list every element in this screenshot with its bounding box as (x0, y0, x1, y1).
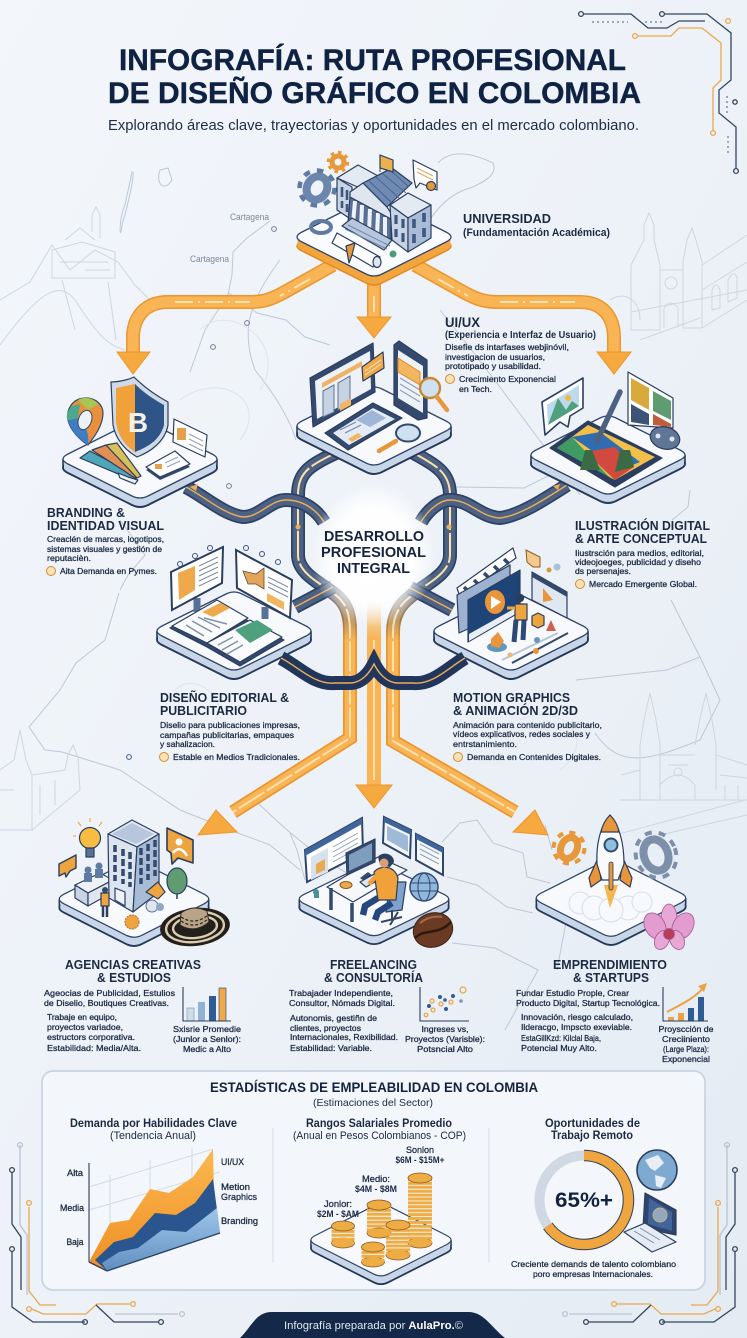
chart: mini scatter (420, 987, 469, 1021)
label: editorial: y sahalizacion. (160, 739, 215, 749)
icon: coffee bean (408, 907, 458, 953)
text: remote note: poro empresas Internacionales. (533, 1269, 653, 1279)
icon: timeline and shapes (487, 613, 568, 663)
panel: ui/ux (297, 341, 451, 474)
landmark: cathedral right (610, 213, 747, 340)
footer: Infografía preparada por AulaPro.© (284, 1320, 463, 1332)
chart axis labels (60, 1157, 258, 1247)
label: editorial: PUBLICITARIO (160, 703, 247, 718)
caption: salario: (Junlor a Senlor): (173, 1034, 241, 1044)
title: INFOGRAFÍA: RUTA PROFESIONAL (119, 43, 626, 77)
title: DE DISEÑO GRÁFICO EN COLOMBIA (108, 76, 641, 110)
icon: phone (394, 341, 427, 420)
label: freelancing: & CONSULTORÍA (324, 970, 424, 985)
icon: tablet (325, 403, 402, 450)
chart axis labels: Media (60, 1203, 84, 1213)
label: agencias: Estabilidad: Media/Alta. (47, 1043, 141, 1053)
icon: magnifiers (379, 378, 447, 451)
icon: swatches (80, 443, 141, 484)
icon: university building (337, 155, 431, 252)
icon: monitor (310, 343, 384, 427)
caption: salario (173, 1024, 241, 1054)
label: agencias: de Diselio, Boutiques Creativas. (44, 998, 169, 1008)
icon: tree (167, 868, 187, 899)
panel: branding (63, 377, 217, 507)
label: agencias (44, 957, 201, 1053)
coin labels: $6M - $15M+ (396, 1155, 444, 1165)
label: branding: IDENTIDAD VISUAL (47, 518, 164, 533)
landmark: mountain church (0, 207, 150, 350)
label: motion: Demanda en Contenides Digitales. (467, 752, 601, 762)
icon: cloud smoke (569, 892, 652, 922)
label: universidad: UNIVERSIDAD (463, 211, 551, 226)
label: ilustracion: & ARTE CONCEPTUAL (575, 531, 707, 546)
chart: mini bars salario (183, 987, 231, 1021)
coin labels: $2M - $AM (317, 1209, 359, 1219)
heading: estadisticas: ESTADÍSTICAS DE EMPLEABILIDAD EN COLOMBIA (210, 1079, 538, 1095)
icon: gears (554, 827, 683, 883)
icon: photo grid (628, 372, 673, 428)
lower road connector (281, 658, 465, 683)
arrows: universidad to branches (117, 265, 631, 374)
label: emprendimiento: EstaGillKzd: Kilclal Baja, (521, 1033, 601, 1043)
icon: gamepad (648, 423, 682, 453)
icon: shield (111, 377, 168, 457)
heading: demanda: (Tendencia Anual) (110, 1130, 196, 1142)
chart: coin stacks (311, 1173, 451, 1284)
chart axis labels: Alta (67, 1168, 83, 1178)
heading: demanda: Demanda por Habilidades Clave (70, 1118, 237, 1130)
icon: gears (300, 152, 348, 233)
label: freelancing: Internacionales, Rexibilidad. (290, 1032, 398, 1042)
center glow (311, 483, 435, 627)
map of Colombia outline (29, 154, 720, 1030)
label: motion: entrstanimiento. (453, 739, 517, 749)
heading: rangos salariales: (Anual en Pesos Colombianos - COP) (293, 1130, 466, 1142)
panel: agencias (59, 818, 232, 950)
city labels: Cartagena (190, 254, 229, 264)
icon: orange figure cluster (146, 882, 165, 912)
caption: proyeccion: Creciiniento (662, 1034, 710, 1044)
label: freelancing: Estabilidad: Variable. (290, 1043, 372, 1053)
panel: estadisticas (42, 1071, 705, 1290)
label: branding: BRANDING & (47, 505, 125, 520)
label: ui/ux: en Tech. (459, 384, 492, 394)
chart: demanda por habilidades (89, 1148, 220, 1271)
icon: shield: B (128, 407, 148, 438)
label: editorial: DISEÑO EDITORIAL & (160, 690, 289, 705)
icon: reception and people (75, 862, 113, 906)
label: agencias: proyectos variadoe, (47, 1022, 123, 1032)
arrowheads lower (198, 810, 548, 835)
icon: person (101, 887, 109, 917)
label: emprendimiento: Fundar Estudio Prople, Crear (516, 988, 629, 998)
icon: rocket (589, 815, 632, 908)
label: universidad (463, 211, 610, 239)
caption: proyeccion: Proyscción de (658, 1024, 714, 1034)
label: emprendimiento (516, 957, 667, 1053)
heading: trabajo remoto: Trabajo Remoto (551, 1130, 633, 1142)
center stem arrow (356, 590, 392, 808)
label: emprendimiento: Potencial Muy Alto. (521, 1043, 597, 1053)
label: emprendimiento: Ilderacgo, Impscto exeviable. (521, 1022, 632, 1032)
coin labels: $4M - $8M (355, 1184, 397, 1194)
central label: DESARROLLO (324, 528, 424, 545)
panel: motion (434, 548, 588, 679)
label: editorial: campañas publicitarias, empaques (160, 730, 294, 740)
label: ilustracion: Iiustrsción para medios, editorial, (575, 548, 704, 558)
panel: universidad (297, 152, 451, 285)
label: ui/ux: investigacion de usuarios, (445, 352, 545, 362)
landmark: cathedral bottom right (615, 693, 747, 835)
label: freelancing: FREELANCING (330, 957, 417, 972)
coin labels: Jonlor: (324, 1199, 352, 1209)
label: freelancing: Autonomis, gestiñn de (290, 1013, 377, 1023)
chart axis labels: Metion (221, 1182, 250, 1192)
label: agencias: Ageocias de Publicidad, Estulios (44, 988, 175, 998)
caption: proyeccion: Exponencial (662, 1054, 710, 1064)
label: agencias: & ESTUDIOS (97, 970, 171, 985)
title (108, 43, 641, 110)
icon: person (363, 854, 406, 925)
icon: landscape card (542, 378, 583, 435)
label: emprendimiento: EMPRENDIMIENTO (553, 957, 667, 972)
icon: open book (170, 600, 284, 666)
label: ilustracion: ds persenajes. (575, 566, 631, 576)
icon: billboards (171, 546, 292, 619)
circuit decoration bottom left (10, 1143, 184, 1324)
coin labels: Medio: (362, 1174, 390, 1184)
chart axis labels: Baja (66, 1237, 84, 1247)
heading: rangos salariales (293, 1118, 466, 1142)
label: agencias: AGENCIAS CREATIVAS (65, 957, 201, 972)
icon: stylus (597, 392, 620, 441)
label: ui/ux: prototipado y usabilidad. (445, 361, 541, 371)
city labels (190, 212, 269, 264)
label: editorial: Diselio para publicaciones impresas, (160, 720, 300, 730)
icon: diploma scroll (332, 233, 396, 268)
label: ui/ux: UI/UX (445, 314, 481, 330)
landmark: colonial church bottom left (0, 730, 80, 830)
icon: orchid (639, 904, 699, 952)
icon: laptop (624, 1193, 676, 1252)
heading: estadisticas: (Estimaciones del Sector) (313, 1097, 433, 1109)
chart: mini growth (663, 983, 708, 1021)
label: emprendimiento: Producto Digital, Startup Tecnológica. (516, 998, 660, 1008)
text: remote note (511, 1259, 676, 1279)
icon: location pin (67, 398, 103, 445)
icon: certificate (413, 160, 437, 190)
icon: digital tablet (550, 421, 662, 487)
label: motion: & ANIMACIÓN 2D/3D (453, 703, 578, 718)
chart: donut 65% (540, 1156, 628, 1244)
coin labels (317, 1145, 444, 1219)
heading: rangos salariales: Rangos Salariales Promedio (306, 1118, 452, 1130)
panel: emprendimiento (536, 815, 699, 952)
label: freelancing: Trabajader Independiente, (289, 988, 393, 998)
panel: ilustracion (531, 372, 685, 503)
icon: chat bubbles (59, 828, 193, 877)
label: agencias: estructors corporativa. (47, 1032, 135, 1042)
caption: ingresos: Proyectos (Varisble): (405, 1034, 485, 1044)
caption: salario: Sxisrie Promedie (173, 1024, 241, 1034)
caption: ingresos: Ingreses vs, (422, 1024, 468, 1034)
caption: ingresos (405, 1024, 485, 1054)
icon: sombrero vueltiao (158, 904, 232, 950)
icon: id card (173, 419, 207, 457)
label: branding: reputacièn. (47, 553, 91, 563)
icon: coin (125, 915, 139, 929)
label: motion: Animación para contenido publicitario, (453, 720, 602, 730)
circuit decoration bottom right (563, 1143, 737, 1324)
icon: business card (146, 451, 190, 480)
panel: freelancing (299, 817, 458, 953)
panel: editorial (157, 546, 311, 679)
label: ui/ux: Disefie ds intarfases webjinóvil, (445, 342, 569, 352)
subtitle: Explorando áreas clave, trayectorias y oportunidades en el mercado colombiano. (108, 117, 639, 134)
label: motion: MOTION GRAPHICS (453, 690, 570, 705)
label: universidad: (Fundamentación Académica) (463, 227, 610, 239)
label: ui/ux: Crecimiento Exponencial (459, 374, 556, 384)
icon: light bulb (73, 818, 102, 857)
icon: desk and monitors (305, 817, 443, 922)
circuit decoration top right (579, 12, 738, 173)
label: editorial (160, 690, 300, 762)
heading: trabajo remoto: Oportunidades de (545, 1118, 640, 1130)
caption: proyeccion (658, 1024, 714, 1064)
icon: animator figure (507, 594, 527, 642)
label: motion: vídeos explicativos, redes sociales y (453, 729, 591, 739)
caption: ingresos: Potsncial Alto (417, 1044, 473, 1054)
label: freelancing (289, 957, 424, 1053)
label: ilustracion: videojoeges, publicidad y diseho (575, 557, 701, 567)
heading: estadisticas (210, 1079, 538, 1109)
label: ilustracion: ILUSTRACIÓN DIGITAL (575, 518, 710, 533)
label: branding (46, 505, 164, 576)
label: branding: Aita Demanda en Pymes. (60, 566, 157, 576)
heading: demanda (70, 1118, 237, 1142)
coin labels: Sonlon (406, 1145, 434, 1155)
central label: PROFESIONAL (321, 544, 426, 561)
caption: salario: Medic a Alto (183, 1044, 231, 1054)
label: ui/ux (445, 314, 596, 394)
caption: proyeccion: (Large Plaza): (663, 1044, 709, 1054)
central label (321, 528, 426, 577)
label: motion (453, 690, 602, 762)
icon: office building (108, 820, 159, 912)
label: freelancing: Consultor, Nómads Digital. (289, 998, 395, 1008)
central label: INTEGRAL (337, 560, 410, 577)
icon: globe (410, 873, 438, 901)
label: ui/ux: (Experiencia e Interfaz de Usuario) (445, 329, 596, 341)
label: branding: sistemas visuales y gestión de (47, 544, 162, 554)
footer (240, 1312, 505, 1338)
chart axis labels: UI/UX (221, 1157, 244, 1167)
chart axis labels: Branding (221, 1216, 258, 1226)
label: ilustracion (575, 518, 710, 589)
label: emprendimiento: Innovación, riesgo calculado, (521, 1012, 633, 1022)
label: editorial: Estable en Medios Tradicionales. (173, 752, 300, 762)
city labels: Cartagena (230, 212, 269, 222)
icon: globe (637, 1150, 677, 1190)
label: agencias: Trabaje en equipo, (47, 1012, 117, 1022)
label: emprendimiento: & STARTUPS (573, 970, 649, 985)
chart: donut 65%: 65%+ (555, 1189, 613, 1212)
label: freelancing: clientes, proyectos (290, 1023, 361, 1033)
heading: trabajo remoto (545, 1118, 640, 1142)
label: branding: Creaclén de marcas, logotipos, (47, 534, 164, 544)
chart axis labels: Graphics (221, 1192, 257, 1202)
label: ilustracion: Mercado Emergente Global. (589, 579, 697, 589)
text: remote note: Creciente demands de talento colombiano (511, 1259, 676, 1269)
icon: video screen (457, 548, 567, 642)
roads: central network (186, 452, 567, 812)
